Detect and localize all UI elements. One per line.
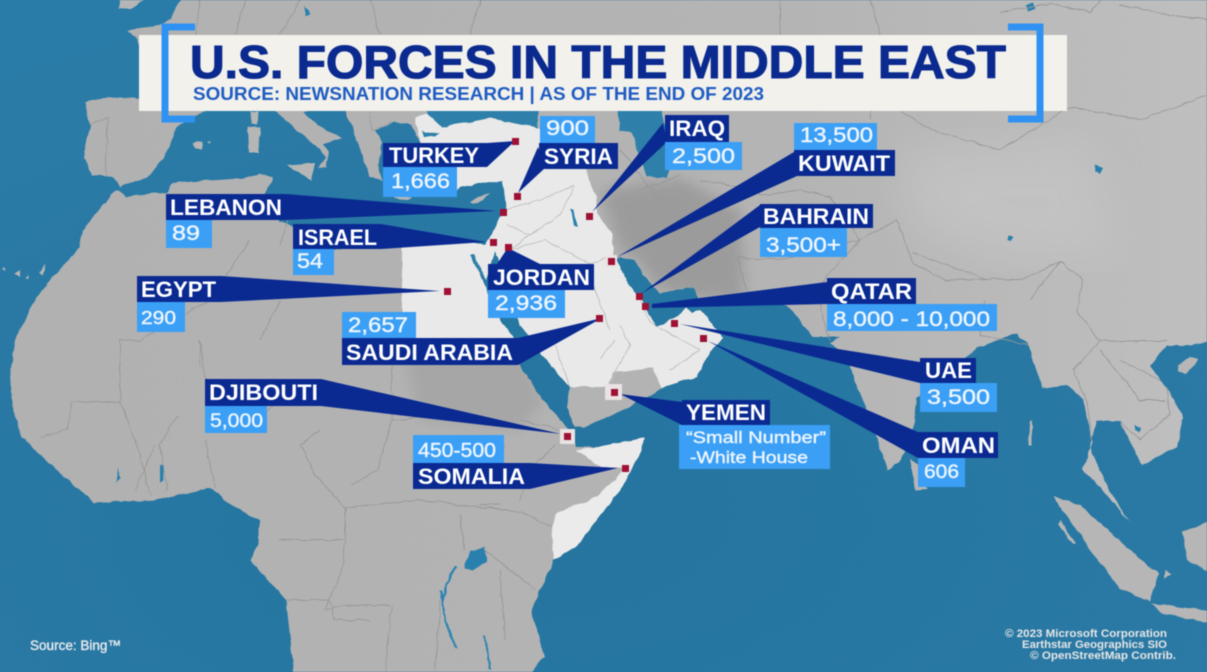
header panel: [139, 27, 1067, 119]
callout: Turkey: [383, 138, 519, 197]
callout: Syria: 900: [546, 117, 589, 140]
borders inside highlighted countries: [505, 185, 700, 387]
left bracket: [165, 27, 195, 119]
callout: Saudi Arabia: 2,657: [348, 314, 408, 337]
callout: Iraq: 2,500: [672, 145, 735, 168]
callout: Djibouti: DJIBOUTI: [209, 380, 318, 405]
terrain shading: [402, 140, 1120, 430]
source line: SOURCE: NEWSNATION RESEARCH | AS OF THE END OF 2023: [193, 84, 764, 104]
callout: Egypt: [137, 276, 451, 332]
callout: Djibouti: [205, 379, 575, 444]
callout: UAE: UAE: [925, 358, 972, 383]
callout: Jordan: JORDAN: [493, 265, 590, 290]
right bracket: [1008, 27, 1040, 119]
callout: Kuwait: 13,500: [800, 124, 873, 147]
highlighted countries: [402, 113, 723, 388]
credit: copyright: [1005, 628, 1176, 662]
inland seas: [422, 100, 670, 178]
callout: Jordan: [488, 244, 594, 318]
credit: map source: Source: Bing™: [30, 637, 121, 653]
callout: Syria: [514, 116, 618, 200]
callout: Qatar: QATAR: [831, 279, 912, 304]
callout: UAE: [671, 320, 997, 412]
callout: Kuwait: KUWAIT: [798, 151, 891, 176]
callout: Bahrain: 3,500+: [766, 234, 841, 257]
callout: Oman: OMAN: [922, 433, 995, 458]
callout: Saudi Arabia: SAUDI ARABIA: [346, 340, 513, 365]
credit: copyright: © OpenStreetMap Contrib.: [1030, 650, 1176, 662]
callout: Saudi Arabia: [342, 312, 603, 365]
callout: Bahrain: [636, 204, 873, 300]
callout: Yemen: YEMEN: [686, 400, 766, 425]
callout: Yemen: [605, 384, 830, 469]
callout: Qatar: [642, 278, 997, 331]
callout: Kuwait: [605, 123, 895, 267]
callout: Yemen: -White House: [690, 448, 808, 467]
title background: [139, 35, 1067, 111]
callout: Lebanon: 89: [172, 222, 200, 245]
callout: Israel: [293, 224, 497, 275]
callout: Iraq: [586, 115, 742, 220]
callout: Israel: 54: [297, 250, 323, 273]
callout: Djibouti: 5,000: [210, 411, 263, 432]
callout: Syria: SYRIA: [544, 144, 613, 169]
callout: UAE: 3,500: [927, 386, 990, 409]
callout: Turkey: TURKEY: [389, 143, 479, 168]
callout: Somalia: SOMALIA: [418, 464, 525, 489]
credit: copyright: Earthstar Geographics SIO: [1022, 639, 1167, 651]
callout: Bahrain: BAHRAIN: [763, 204, 869, 229]
callout: Somalia: 450-500: [418, 440, 496, 462]
callout: Lebanon: LEBANON: [170, 195, 282, 220]
callout: Jordan: 2,936: [495, 292, 557, 315]
callout: Oman: [700, 335, 998, 487]
callout: Iraq: IRAQ: [669, 116, 725, 141]
credit: copyright: © 2023 Microsoft Corporation: [1005, 628, 1167, 640]
callout: Yemen: “Small Number”: [686, 428, 826, 447]
callout: Oman: 606: [924, 462, 959, 483]
callout: Turkey: 1,666: [391, 170, 450, 193]
callout: Egypt: EGYPT: [141, 277, 217, 302]
callout: Somalia: [413, 435, 629, 489]
callout: Egypt: 290: [141, 308, 176, 328]
title: U.S. FORCES IN THE MIDDLE EAST: [190, 36, 1006, 88]
callout: Qatar: 8,000 - 10,000: [833, 308, 990, 331]
callout: Lebanon: [166, 194, 507, 248]
callout: Israel: ISRAEL: [298, 225, 377, 250]
